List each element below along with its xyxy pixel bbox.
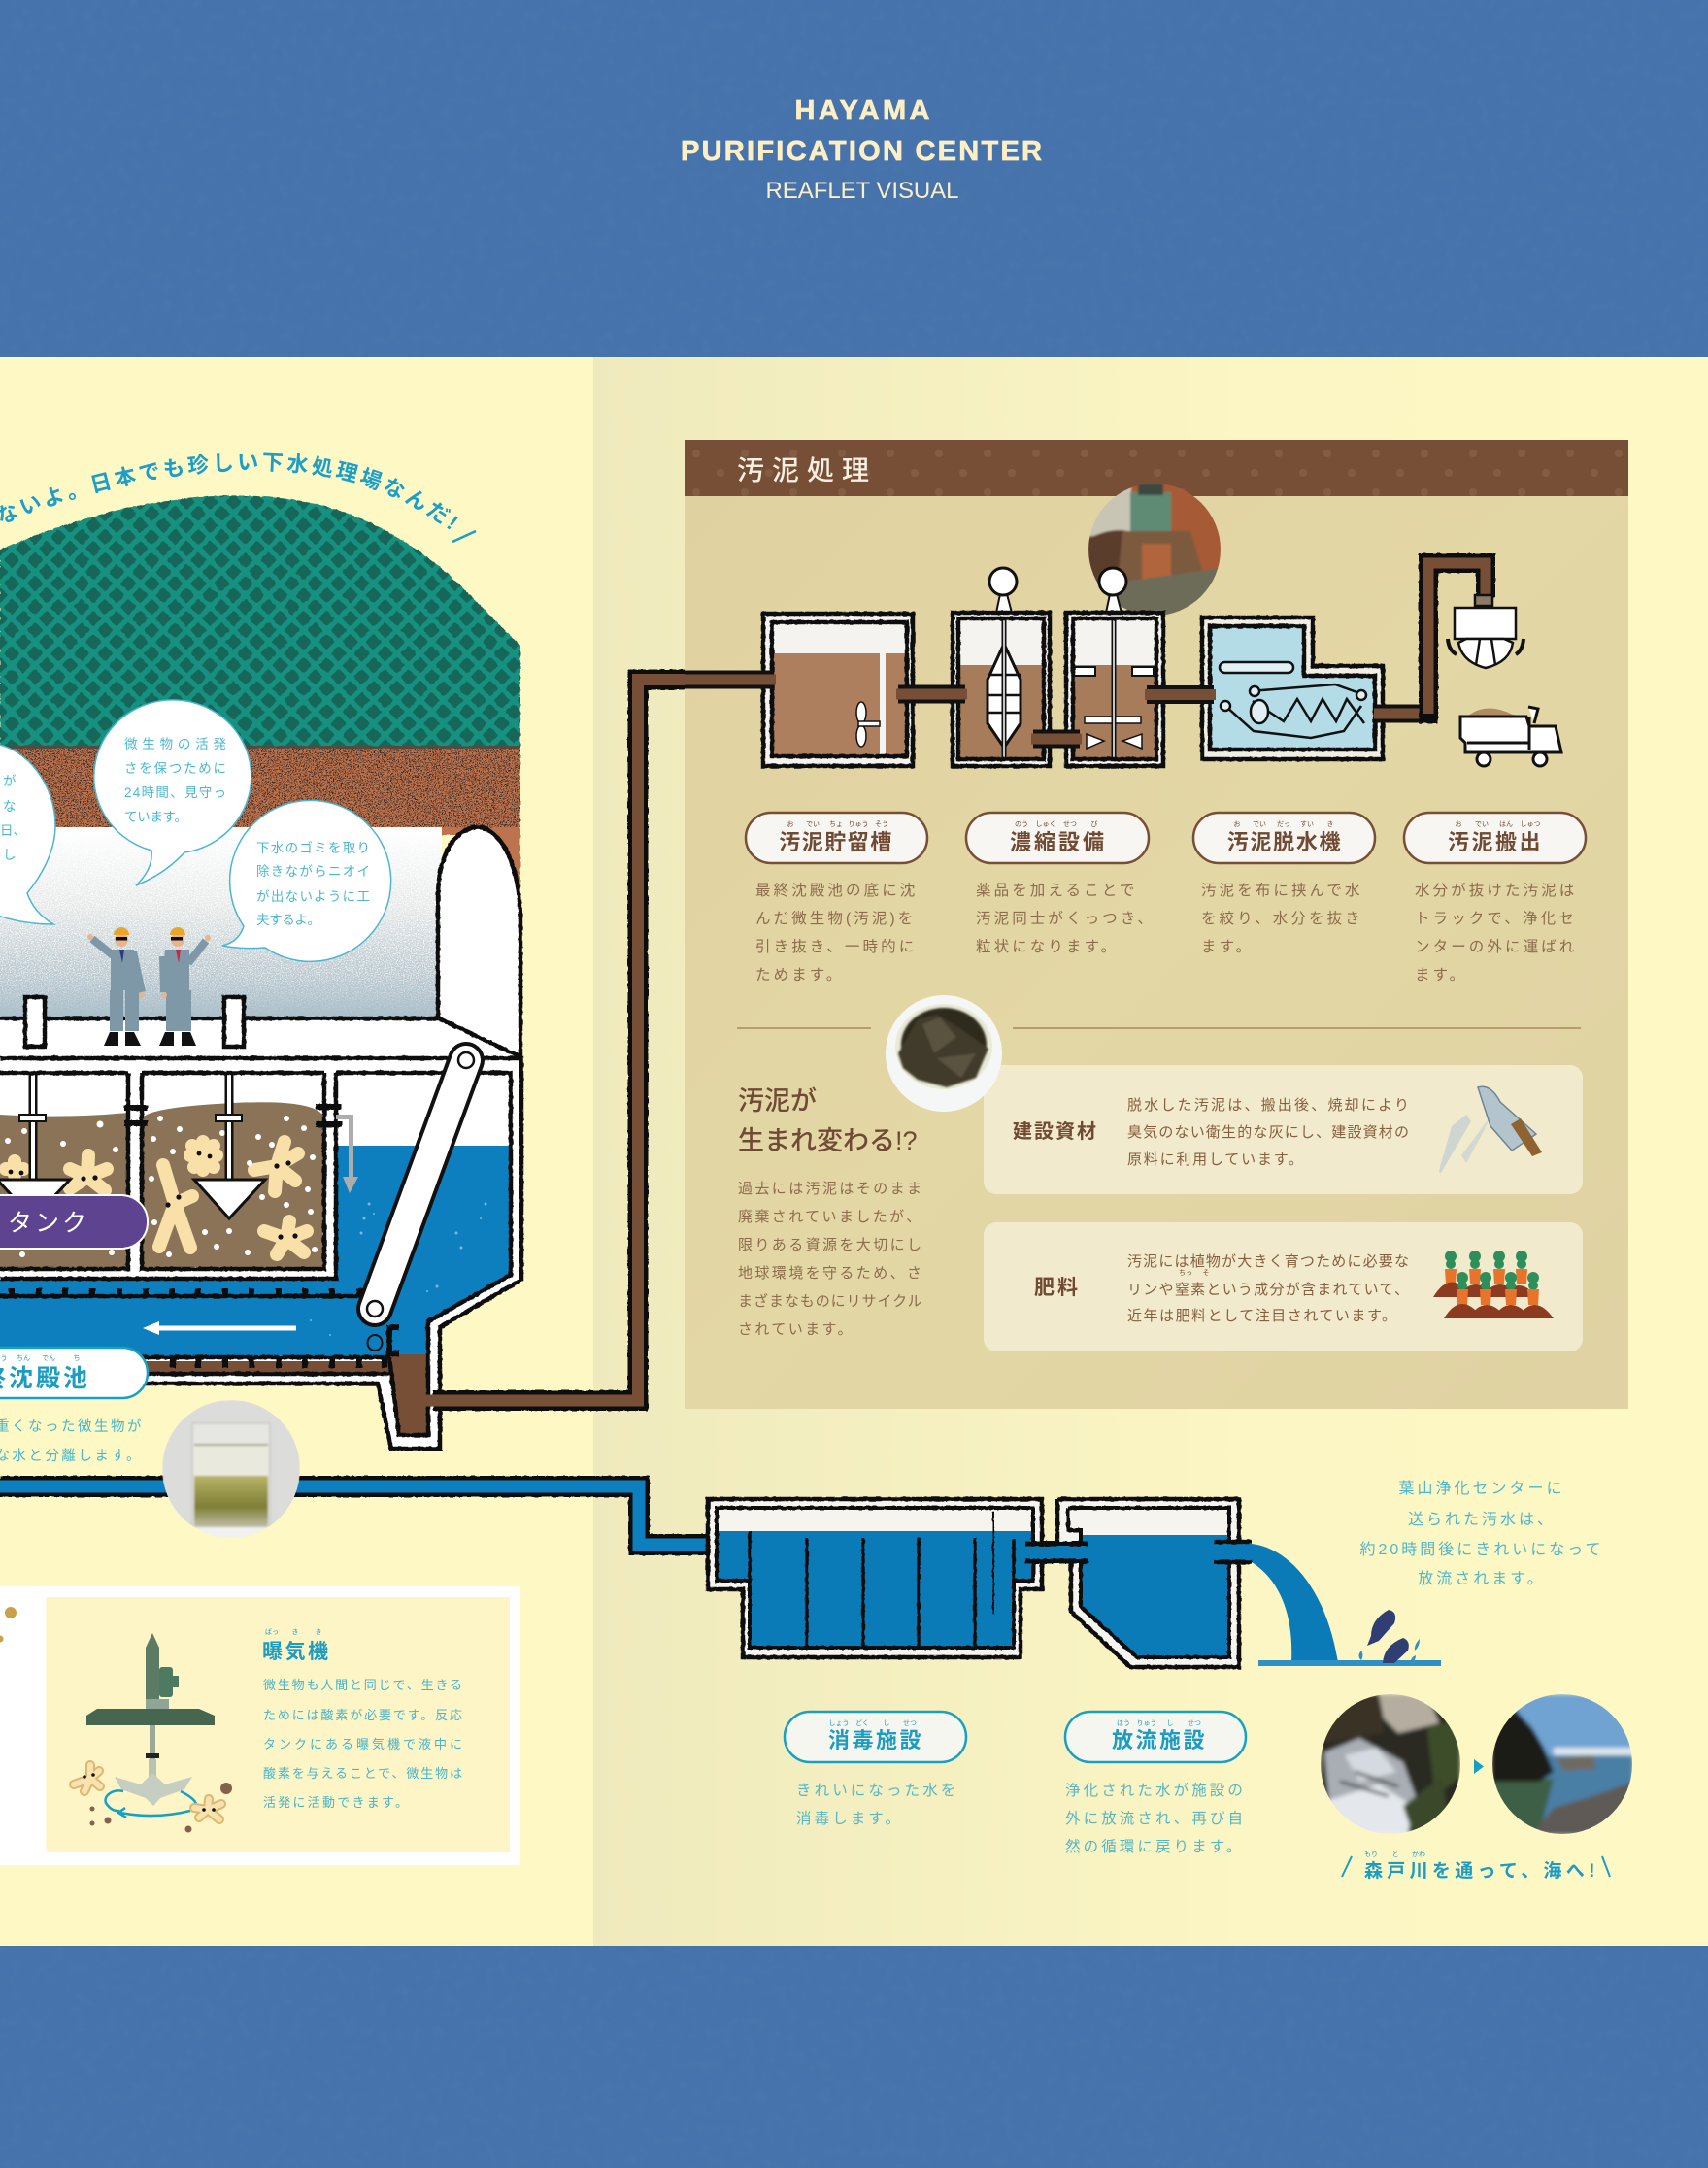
microbes: [6, 1142, 307, 1254]
text: outflow: [1065, 1782, 1246, 1855]
closing message: 送られた汚水は、: [1408, 1511, 1556, 1528]
speech bubble: left: が: [3, 774, 17, 788]
speech bubble: right: 下水のゴミを取り: [256, 840, 370, 855]
sludge outlet pipe: [1428, 563, 1486, 723]
recycling description: まざまなものにリサイクル: [738, 1292, 924, 1310]
title: REAFLET VISUAL: [765, 178, 959, 204]
aerator heading: ばっ: [265, 1627, 279, 1636]
hopper: [1448, 595, 1524, 668]
label: tank: タンク: [8, 1210, 89, 1237]
aerator description: 微生物も人間と同じで、生きる: [263, 1678, 462, 1692]
label: final settling tank: でん: [42, 1354, 55, 1362]
speech bubble: right: 夫するよ。: [256, 913, 320, 927]
aerator description: ためには酸素が必要です。反応: [263, 1708, 462, 1722]
text: storage: 最終沈殿池の底に沈: [755, 882, 918, 899]
card: fertilizer: ちっ: [1179, 1269, 1192, 1277]
card: construction materials: [984, 1065, 1583, 1194]
recycling divider: [737, 1027, 1581, 1029]
river caption: がわ: [1412, 1850, 1425, 1858]
outflow facility tank: [1057, 1499, 1239, 1667]
recycling description: 限りある資源を大切にし: [738, 1237, 923, 1253]
step label: storage: ちょ: [829, 820, 843, 828]
underground room: [0, 827, 442, 1019]
icon: shovel: [1439, 1086, 1542, 1173]
text: outflow: 浄化された水が施設の: [1065, 1782, 1246, 1799]
speech bubble: center: 微生物の活発: [124, 737, 227, 751]
photo: dried sludge in bowl: [886, 995, 1002, 1112]
step label: thickening: [966, 813, 1149, 863]
text: disinfection: 消毒します。: [796, 1810, 903, 1827]
card: fertilizer: 肥料: [1034, 1277, 1081, 1299]
dump truck: [1460, 707, 1561, 766]
label: disinfection facility: しょう: [829, 1719, 849, 1727]
speech bubble: left: [0, 743, 55, 924]
right aeration tank contents: [144, 1102, 322, 1267]
step label: thickening: しゅく: [1035, 820, 1056, 828]
label: final settling tank: う: [0, 1354, 8, 1362]
worker right: [159, 927, 211, 1046]
step label: carry out: [1404, 813, 1586, 863]
aerator heading: [262, 1627, 330, 1663]
speech bubble: left: し: [3, 848, 16, 862]
grey inflow arrow: [336, 1115, 358, 1193]
stirrers: [0, 1074, 265, 1218]
label: outflow facility: りゅう: [1136, 1719, 1157, 1727]
step label: dewatering: だっ: [1277, 820, 1290, 828]
title: [681, 95, 1042, 204]
thickening tank 2: [1066, 568, 1163, 766]
speech bubble: center: さを保つために: [124, 761, 226, 776]
closing message: [1359, 1480, 1604, 1587]
air bubbles in water: [310, 1202, 487, 1336]
sludge panel header: [685, 440, 1628, 496]
recycling heading: [738, 1086, 918, 1155]
treated water pipe: [0, 1486, 720, 1545]
text: thickening: 汚泥同士がくっつき、: [976, 910, 1155, 927]
aerator heading: き: [291, 1628, 299, 1636]
aerator heading: 曝気機: [262, 1641, 330, 1663]
aerator description: [263, 1678, 462, 1810]
photo: beaker: [162, 1400, 300, 1539]
photo: thickener machine: [1088, 483, 1222, 621]
step label: dewatering: [1193, 813, 1375, 863]
step label: carry out: しゅつ: [1521, 820, 1540, 828]
step label: carry out: でい: [1475, 820, 1489, 828]
recycling description: されています。: [738, 1321, 854, 1338]
scraper arm: [367, 1052, 474, 1351]
label: disinfection facility: 消毒施設: [828, 1728, 923, 1752]
step label: dewatering: お: [1233, 820, 1241, 828]
text: carry out: 水分が抜けた汚泥は: [1415, 882, 1577, 899]
text: outflow: 外に放流され、再び自: [1065, 1810, 1246, 1827]
recycling description: 過去には汚泥はそのまま: [738, 1181, 923, 1197]
label: disinfection facility: し: [884, 1719, 889, 1727]
card: construction materials: 臭気のない衛生的な灰にし、建設資材の: [1127, 1124, 1409, 1141]
worker left: [87, 927, 145, 1046]
aerator machine illustration: [74, 1633, 232, 1833]
aerator heading: き: [315, 1628, 322, 1636]
microbe eyes: [9, 1151, 298, 1240]
oxygen dots: [5, 1116, 318, 1257]
text: storage: ためます。: [755, 966, 844, 984]
step label: carry out: はん: [1499, 820, 1513, 828]
aerator description: 酸素を与えることで、微生物は: [263, 1766, 462, 1781]
label: final settling tank: [0, 1348, 148, 1398]
recycling description: [738, 1181, 924, 1338]
label: outflow facility: 放流施設: [1112, 1728, 1207, 1752]
aerator description: タンクにある曝気機で液中に: [263, 1737, 462, 1751]
card: construction materials: 原料に利用しています。: [1127, 1151, 1303, 1168]
recycling heading: 生まれ変わる!?: [738, 1126, 918, 1155]
text: storage: んだ微生物(汚泥)を: [755, 910, 916, 927]
river caption: 森戸川を通って、海へ!: [1364, 1860, 1599, 1882]
label: outflow facility: [1065, 1712, 1246, 1762]
card: construction materials: 脱水した汚泥は、搬出後、焼却により: [1127, 1097, 1409, 1114]
label: outflow facility: し: [1167, 1719, 1173, 1727]
speech bubble: left: な: [3, 799, 16, 814]
structure outlines: [0, 997, 521, 1449]
step label: thickening: せつ: [1063, 820, 1077, 828]
card: construction materials: 建設資材: [1013, 1120, 1098, 1143]
soil layer: [0, 746, 520, 932]
card: fertilizer: リンや窒素という成分が含まれていて、: [1127, 1282, 1409, 1298]
step label: storage: そう: [875, 820, 888, 828]
label: outflow facility: せつ: [1188, 1719, 1201, 1727]
step label: thickening: のう: [1015, 820, 1028, 828]
pipe between disinfection and outflow: [1025, 1544, 1088, 1561]
closing message: 約20時間後にきれいになって: [1359, 1541, 1604, 1558]
step label: storage: 汚泥貯留槽: [779, 830, 893, 854]
recycling heading: 汚泥が: [738, 1086, 817, 1116]
step label: storage: でい: [806, 820, 820, 828]
text: dewatering: 汚泥を布に挟んで水: [1201, 882, 1363, 899]
step label: carry out: 汚泥搬出: [1448, 830, 1543, 854]
sludge storage tank: [763, 614, 913, 766]
step label: thickening: 濃縮設備: [1010, 830, 1107, 854]
aerator panel: [0, 1586, 520, 1865]
text: storage: [755, 882, 918, 984]
step label: dewatering: すい: [1300, 820, 1314, 828]
text: carry out: トラックで、浄化セ: [1415, 910, 1577, 927]
speech bubble: right: 除きながらニオイ: [256, 864, 370, 879]
speech bubble: left: 日、: [0, 823, 26, 838]
outflow waterfall: [1214, 1542, 1441, 1666]
label: disinfection facility: せつ: [903, 1719, 917, 1727]
card: fertilizer: 近年は肥料として注目されています。: [1127, 1308, 1396, 1324]
dome hatch: [438, 827, 520, 1058]
step label: carry out: お: [1455, 820, 1462, 828]
recycling description: 地球環境を守るため、さ: [738, 1265, 923, 1282]
text: dewatering: [1201, 882, 1363, 955]
text: disinfection: [796, 1782, 958, 1827]
label: final settling tank: ちん: [17, 1354, 30, 1362]
left aeration tank contents: [0, 1113, 128, 1267]
sludge pipe from settling tank to storage: [423, 680, 699, 1400]
speech bubble: right: [222, 800, 391, 961]
hill: [0, 495, 520, 748]
text: outflow: 然の循環に戻ります。: [1065, 1838, 1244, 1855]
treatment building cross section: [0, 495, 521, 1449]
arrow between photos: [1474, 1759, 1484, 1774]
text: thickening: [976, 882, 1155, 955]
text: storage: 引き抜き、一時的に: [755, 938, 917, 955]
label: outflow facility: ほう: [1117, 1719, 1130, 1727]
connecting pipes between tanks: [685, 680, 1425, 739]
speech bubble: center: ています。: [124, 810, 187, 824]
white flow arrow: [143, 1321, 296, 1335]
text: dewatering: を絞り、水分を抜き: [1201, 910, 1363, 927]
label: final settling tank: ち: [74, 1354, 80, 1362]
title: HAYAMA: [794, 95, 930, 126]
text: disinfection: きれいになった水を: [796, 1782, 958, 1799]
icon: carrots: [1433, 1251, 1554, 1318]
card: fertilizer: [984, 1222, 1583, 1351]
card: fertilizer: 汚泥には植物が大きく育つために必要な: [1127, 1253, 1409, 1270]
settled sludge: [0, 1354, 428, 1435]
speech bubble: center: 24時間、見守っ: [124, 785, 226, 800]
text: carry out: ンターの外に運ばれ: [1415, 938, 1577, 955]
speech bubble: right: が出ないように工: [256, 889, 370, 904]
text: dewatering: ます。: [1201, 938, 1254, 955]
text: thickening: 粒状になります。: [976, 938, 1119, 955]
step label: storage: お: [787, 820, 794, 828]
label: tank: [0, 1195, 148, 1249]
step label: storage: [746, 813, 927, 863]
speech bubble: center: [94, 700, 251, 885]
step label: dewatering: でい: [1253, 820, 1266, 828]
photo: sea: [1491, 1694, 1633, 1835]
closing message: 葉山浄化センターに: [1398, 1480, 1565, 1497]
title: PURIFICATION CENTER: [681, 136, 1042, 167]
thickening tank 1: [953, 568, 1050, 766]
card: fertilizer: そ: [1202, 1269, 1210, 1277]
river caption: もり: [1364, 1851, 1378, 1858]
panel: sludge treatment: [685, 440, 1628, 1409]
text: carry out: [1415, 882, 1577, 984]
step label: thickening: び: [1091, 820, 1097, 828]
dewatering machine: [1202, 617, 1383, 759]
curved caption above the hill: ないよ。日本でも珍しい下水処理場なんだ!: [0, 452, 458, 530]
settling water: [0, 1146, 511, 1355]
label: disinfection facility: [785, 1712, 966, 1762]
photo: river: [1321, 1694, 1460, 1834]
river caption: と: [1392, 1851, 1398, 1858]
text: carry out: ます。: [1415, 966, 1467, 984]
text: thickening: 薬品を加えることで: [976, 882, 1137, 899]
sludge panel header: 汚泥処理: [737, 455, 877, 485]
step label: storage: りゅう: [849, 820, 868, 828]
aerator description: 活発に活動できます。: [263, 1795, 408, 1810]
closing message: 放流されます。: [1418, 1570, 1546, 1587]
jumping fish: [1359, 1610, 1420, 1663]
step label: dewatering: 汚泥脱水機: [1227, 830, 1342, 854]
final settling text: [0, 1418, 144, 1464]
recycling description: 廃棄されていましたが、: [738, 1209, 923, 1225]
label: disinfection facility: どく: [855, 1719, 869, 1727]
white building body: [0, 1017, 521, 1449]
step label: dewatering: き: [1326, 820, 1334, 828]
disinfection facility tank: [708, 1499, 1042, 1657]
river caption: [1342, 1850, 1610, 1882]
